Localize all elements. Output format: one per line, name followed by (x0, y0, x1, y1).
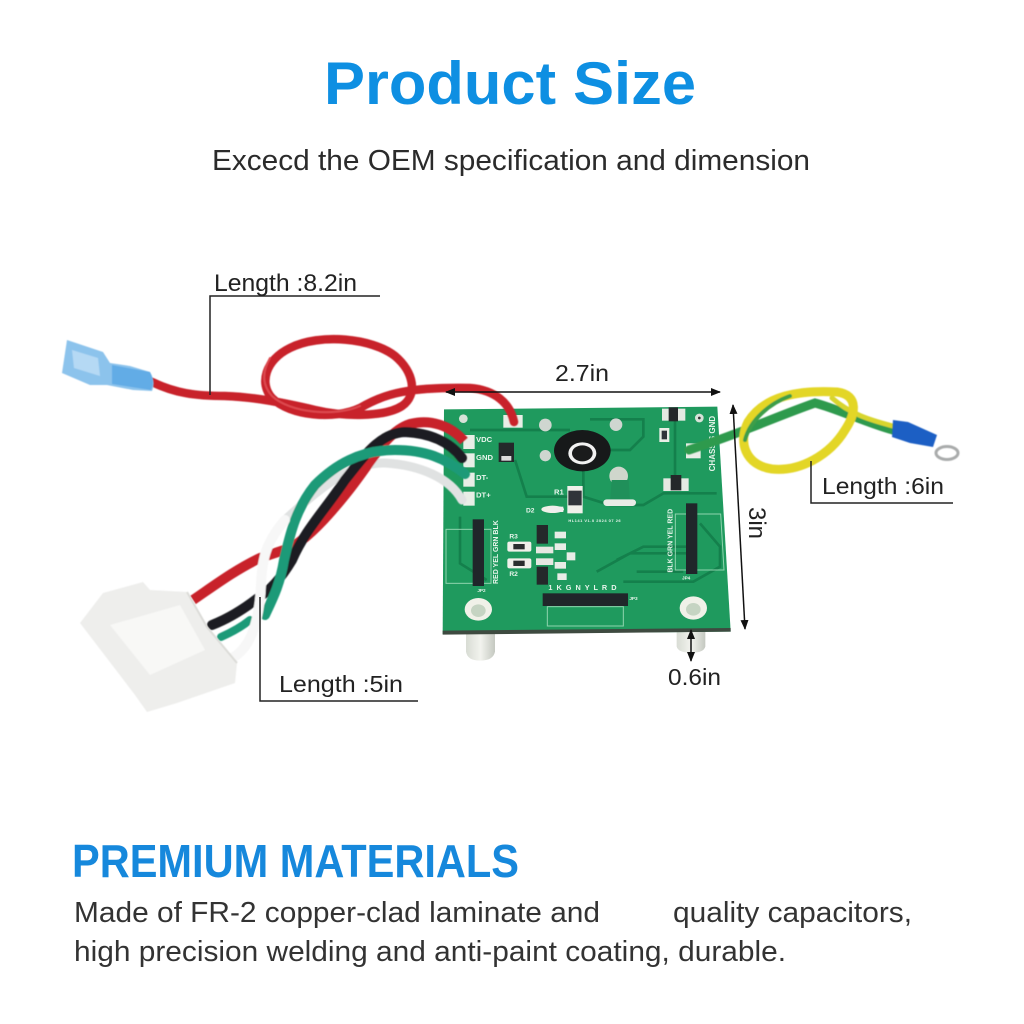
wire: green (265, 450, 465, 615)
icon: white connector (80, 582, 237, 712)
wire: red power wire with loop (152, 339, 514, 422)
silkscreen labels: R3 (509, 534, 518, 541)
icon: circuit board (443, 407, 731, 661)
silkscreen labels: RED YEL GRN BLK (493, 520, 500, 584)
silkscreen labels: CHASSIS GND (708, 416, 717, 471)
header pins (473, 503, 697, 606)
icon: blue spade terminal (62, 340, 154, 391)
dimension: 3in height (733, 405, 770, 629)
body text (74, 897, 912, 968)
silkscreen labels: VDC (476, 435, 493, 444)
dimension: 5in wire: Length :5in (279, 671, 403, 697)
wire: white (285, 463, 462, 520)
copper traces (460, 410, 720, 582)
body text: Made of FR-2 copper-clad laminate and (74, 897, 600, 929)
title: Product Size (324, 50, 696, 117)
subtitle: Excecd the OEM specification and dimension (212, 145, 810, 177)
board edge (443, 628, 731, 635)
silkscreen labels: JP2 (477, 588, 486, 593)
silkscreen labels: DT+ (476, 490, 491, 499)
wire: white lower (232, 520, 285, 658)
potentiometer ring (554, 430, 611, 471)
silkscreen labels: JP4 (682, 575, 691, 580)
dimension: 8.2in wire: Length :8.2in (214, 270, 357, 297)
silkscreen outlines (446, 514, 724, 626)
silkscreen labels: DT- (476, 473, 489, 482)
dimension: 6in wire: Length :6in (822, 473, 944, 499)
silkscreen labels: D2 (526, 508, 535, 515)
silkscreen labels: JP3 (629, 596, 638, 601)
wire: green and yellow ground wire (689, 392, 893, 469)
wire: red (193, 422, 464, 600)
icon: ring terminal (892, 420, 958, 460)
surface components (499, 407, 689, 585)
dimension: 3in height: 3in (743, 507, 770, 539)
dimension: 0.6in standoff: 0.6in (668, 664, 721, 690)
body text: quality capacitors, (673, 897, 912, 929)
mounting holes (459, 414, 707, 621)
dimension: 5in wire (260, 597, 418, 701)
standoff: right (677, 632, 705, 653)
dimension: 6in wire (811, 461, 953, 503)
dimension: 2.7in width: 2.7in (555, 360, 609, 386)
board base (443, 407, 731, 634)
silkscreen labels: 1 K G N Y L R D (548, 583, 618, 592)
silkscreen labels: R2 (509, 571, 518, 578)
standoff: left (466, 633, 495, 661)
wire bundle (193, 422, 465, 658)
wire: black (212, 432, 462, 625)
silkscreen labels: GND (476, 453, 493, 462)
body text: high precision welding and anti-paint coating, durable. (74, 936, 786, 968)
silkscreen labels: BLK GRN YEL RED (668, 509, 675, 573)
heading: premium materials: PREMIUM MATERIALS (72, 835, 519, 887)
silkscreen labels: R1 (554, 487, 565, 496)
dimension: 0.6in standoff (668, 630, 721, 690)
wire: green lower (221, 620, 250, 637)
silkscreen labels: HL141 V1.0 2024 07 26 (568, 518, 621, 523)
solder pads (463, 415, 701, 506)
dimension: 8.2in wire (210, 270, 380, 395)
silkscreen labels (476, 416, 717, 601)
